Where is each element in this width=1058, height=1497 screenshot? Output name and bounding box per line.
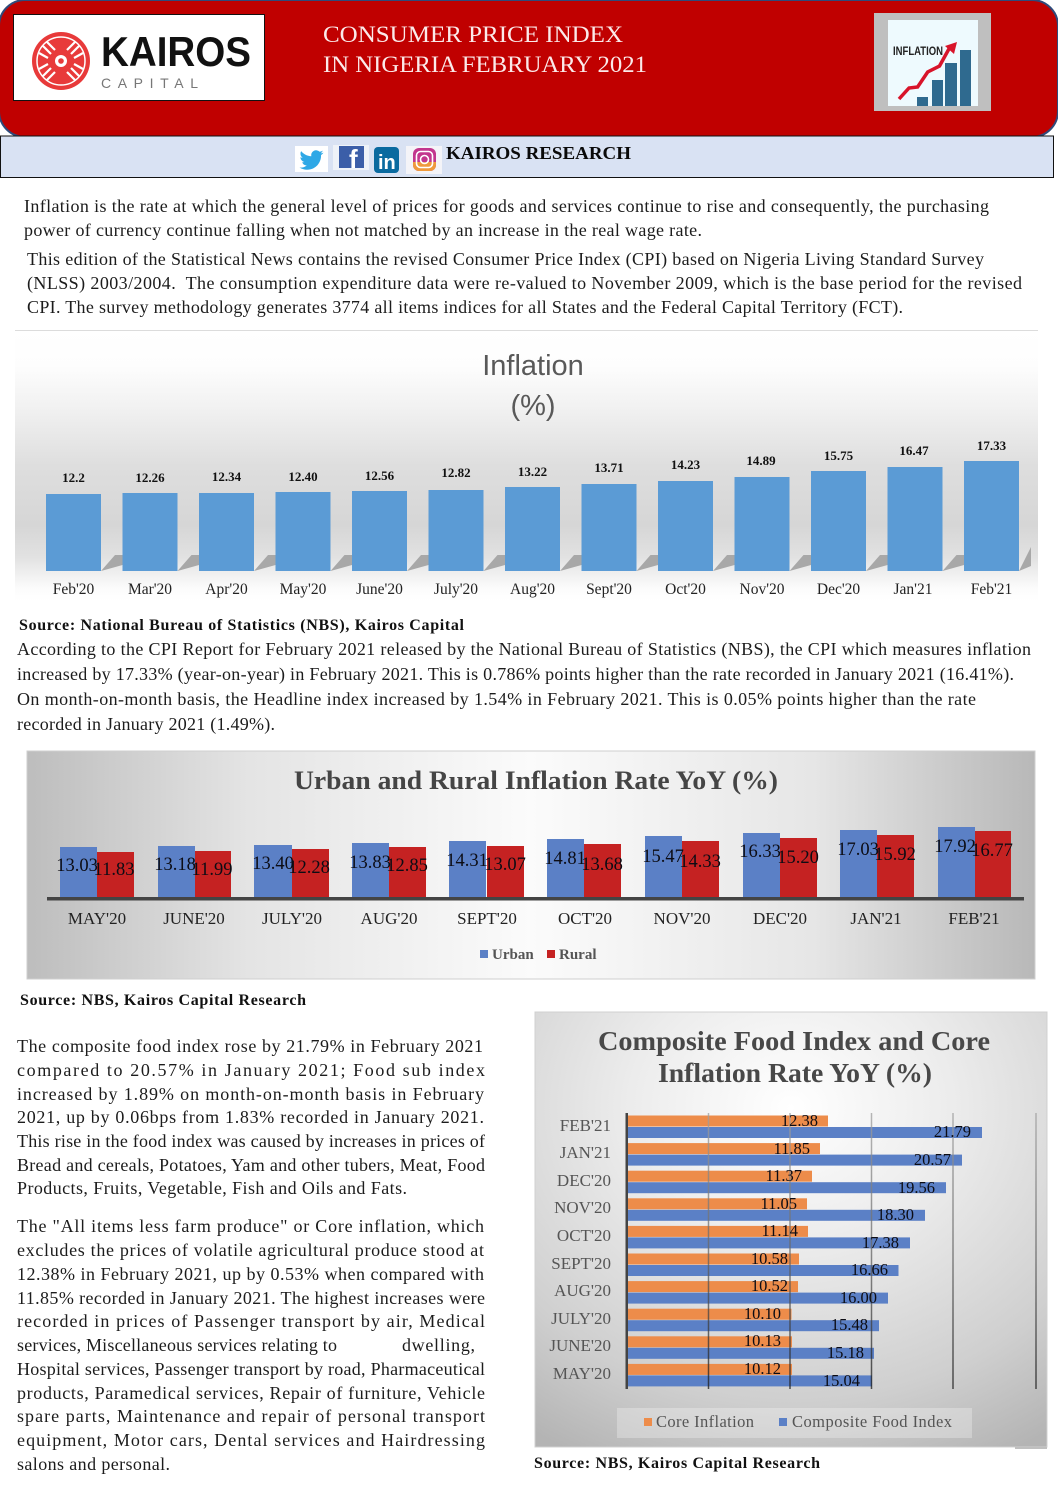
composite food data labels: 19.56 [898,1178,935,1197]
paragraph: composite food index: 2021, up by 0.06bps from 1.83% recorded in January 2021. [17,1107,484,1127]
data labels [62,438,1007,485]
core inflation data labels: 11.37 [765,1166,802,1185]
urban data labels: 17.92 [934,837,976,857]
rural data labels: 13.68 [581,855,623,875]
composite food data labels: 20.57 [914,1150,951,1169]
axis [47,897,1024,900]
core inflation data labels: 11.85 [773,1139,810,1158]
category labels: July'20 [434,581,478,598]
category labels: May'20 [280,581,327,598]
category labels: Dec'20 [817,581,860,598]
vertical axis [626,1113,628,1389]
rural data labels: 12.85 [386,856,428,876]
category labels: MAY'20 [68,909,126,928]
paragraph: CPI report summary: On month-on-month basis, the Headline index increased by 1.54% in February 2021. This is 0.05% points higher than the rate [17,689,976,709]
logo: Kairos Capital: KAIROS [101,28,251,75]
category labels: Sept'20 [586,581,632,598]
chart title: Urban and Rural Inflation Rate YoY (%) [294,766,778,795]
paragraph: CPI report summary [17,639,1031,735]
paragraph: composite food index: increased by 1.89% on month-on-month basis in February [17,1084,484,1104]
paragraph: composite food index: Products, Fruits, Vegetable, Fish and Oils and Fats. [17,1178,407,1198]
paragraph: composite food index [17,1036,485,1198]
rural data labels: 12.28 [288,858,330,878]
composite food data labels: 15.04 [823,1371,860,1390]
intro paragraph: inflation definition: power of currency continue falling when not matched by an increase in the real wage rate. [24,220,702,240]
category labels: Oct'20 [665,581,706,598]
logo: Kairos Capital: CAPITAL [101,75,198,91]
intro paragraph: statistical news: (NLSS) 2003/2004. The consumption expenditure data were re-valued to November 2009, which is the base period for the revised [27,273,1022,294]
core inflation data labels: 12.38 [781,1111,818,1130]
intro paragraph: statistical news [27,249,1022,318]
paragraph: core inflation: The "All items less farm produce" or Core inflation, which [17,1216,484,1236]
core inflation data labels: 10.52 [751,1276,788,1295]
icon: facebook [333,144,369,174]
composite food data labels: 15.18 [827,1343,864,1362]
category labels [549,1116,611,1383]
composite food data labels: 16.00 [840,1288,877,1307]
composite food data labels: 21.79 [934,1122,971,1141]
data labels: 13.71 [594,460,624,475]
chart title [598,1026,990,1088]
urban data labels [56,837,976,876]
data labels: 15.75 [824,448,854,463]
gridlines [708,1113,1036,1389]
paragraph: core inflation: dwelling, [402,1335,475,1355]
data labels: 16.47 [899,443,929,458]
icon: inflation chart [874,13,991,111]
intro paragraph: statistical news: This edition of the Statistical News contains the revised Consumer Price Index (CPI) based on Nigeria Living Standard Survey [27,249,984,270]
bars [46,461,1019,571]
data labels: 12.82 [441,465,471,480]
rural data labels: 15.20 [777,848,819,868]
icon: facebook: f [349,144,358,174]
icon: twitter [295,146,328,172]
category labels: Nov'20 [740,581,785,598]
report title: CONSUMER PRICE INDEX [323,22,623,47]
category labels: JAN'21 [560,1143,611,1162]
chart title: Composite Food Index and Core [598,1026,990,1056]
data labels: 14.23 [671,457,701,472]
legend: Rural [559,947,596,963]
paragraph: CPI report summary: increased by 17.33% (year-on-year) in February 2021. This is 0.786% points higher than the rate recorded in January 2021 (16.41%). [17,664,1014,685]
composite food data labels: 18.30 [877,1205,914,1224]
paragraph: core inflation: Hospital services, Passenger transport by road, Pharmaceutical [17,1359,485,1379]
rural data labels: 15.92 [874,845,916,865]
paragraph: CPI report summary: According to the CPI Report for February 2021 released by the National Bureau of Statistics (NBS), the CPI which measures inflation [17,639,1031,660]
data labels: 12.56 [365,468,395,483]
bar shadows [101,547,1031,571]
urban data labels: 15.47 [642,847,684,867]
intro paragraph: statistical news: CPI. The survey methodology generates 3774 all items indices for all States and the Federal Capital Territory (FCT). [27,297,903,318]
category labels: Feb'20 [53,581,95,598]
core inflation data labels: 10.58 [751,1249,788,1268]
core inflation data labels: 10.12 [744,1359,781,1378]
composite food data labels: 16.66 [851,1260,888,1279]
urban data labels: 13.18 [154,855,196,875]
paragraph: core inflation: products, Paramedical services, Repair of furniture, Vehicle [17,1383,485,1403]
urban data labels: 13.40 [252,854,294,874]
urban data labels: 13.03 [56,856,98,876]
category labels: FEB'21 [948,909,1000,928]
chart title: Inflation Rate YoY (%) [658,1058,932,1088]
data labels: 12.40 [288,469,318,484]
urban data labels: 16.33 [739,842,781,862]
category labels: Jan'21 [894,581,932,598]
legend: Composite Food Index [792,1412,953,1431]
paragraph: core inflation: recorded in prices of Passenger transport by air, Medical [17,1311,485,1331]
core inflation bars [627,1116,828,1375]
category labels: MAY'20 [553,1364,611,1383]
paragraph: composite food index: Bread and cereals, Potatoes, Yam and other tubers, Meat, Food [17,1155,485,1175]
category labels: Aug'20 [510,581,555,598]
category labels: SEPT'20 [457,909,517,928]
intro paragraph: inflation definition [24,196,989,240]
data labels: 13.22 [518,464,547,479]
logo: Kairos Capital [14,14,264,100]
legend [480,947,596,963]
rural data labels [94,841,1013,880]
chart title: Inflation [482,350,584,382]
source note: inflation chart: Source: National Bureau of Statistics (NBS), Kairos Capital [19,617,465,634]
paragraph: core inflation: 11.85% recorded in January 2021. The highest increases were [17,1288,485,1308]
composite food data labels: 15.48 [831,1315,868,1334]
data labels: 14.89 [746,453,776,468]
paragraph: core inflation: equipment, Motor cars, Dental services and Hairdressing [17,1430,485,1450]
category labels: Mar'20 [128,581,172,598]
category labels: SEPT'20 [551,1254,611,1273]
category labels: AUG'20 [361,909,417,928]
composite food data labels: 17.38 [862,1233,899,1252]
legend [617,1408,972,1438]
urban bars [60,827,975,897]
paragraph: CPI report summary: recorded in January 2021 (1.49%). [17,714,275,735]
category labels: FEB'21 [560,1116,611,1135]
paragraph: composite food index: The composite food index rose by 21.79% in February 2021 [17,1036,483,1056]
category labels: JUNE'20 [549,1336,611,1355]
category labels: AUG'20 [554,1281,611,1300]
legend: Urban [492,947,534,963]
category labels: DEC'20 [753,909,807,928]
category labels: OCT'20 [557,1226,611,1245]
rural data labels: 11.83 [94,860,134,880]
urban data labels: 13.83 [349,853,391,873]
rural bars [97,831,1011,897]
rural data labels: 11.99 [192,860,232,880]
data labels: 12.34 [212,469,242,484]
social media strip [0,136,1054,178]
paragraph: core inflation [17,1216,485,1474]
paragraph: core inflation: salons and personal. [17,1454,170,1474]
category labels: JAN'21 [850,909,902,928]
urban data labels: 17.03 [837,840,879,860]
icon: inflation chart: INFLATION [893,46,943,58]
paragraph: core inflation: spare parts, Maintenance and repair of personal transport [17,1406,485,1426]
source note: urban and rural chart: Source: NBS, Kairos Capital Research [20,992,306,1009]
category labels: JUNE'20 [163,909,225,928]
category labels: Feb'21 [971,581,1012,598]
legend: Core Inflation [656,1412,754,1431]
category labels: June'20 [356,581,403,598]
category labels: OCT'20 [558,909,612,928]
intro paragraph: inflation definition: Inflation is the rate at which the general level of prices for goods and services continue to rise and consequently, the purchasing [24,196,989,216]
report title: IN NIGERIA FEBRUARY 2021 [323,52,647,77]
strip label: KAIROS RESEARCH [446,143,631,163]
data labels: 17.33 [977,438,1007,453]
category labels: JULY'20 [262,909,322,928]
icon: instagram [406,146,442,174]
composite food index bars [627,1127,982,1386]
composite food data labels [823,1122,971,1390]
chart title: (%) [510,390,556,422]
category labels [68,909,1000,928]
category labels: NOV'20 [654,909,710,928]
chart title [482,350,584,422]
core inflation data labels: 11.05 [760,1194,797,1213]
rural data labels: 16.77 [971,841,1013,861]
report title [323,22,647,77]
category labels [53,581,1012,598]
icon: linkedin: in [378,152,396,174]
paragraph: core inflation: services, Miscellaneous services relating to [17,1335,337,1355]
paragraph: core inflation: 12.38% in February 2021, up by 0.53% when compared with [17,1264,484,1284]
chart: urban and rural inflation [27,751,1035,979]
urban data labels: 14.31 [446,851,488,871]
category labels: DEC'20 [557,1171,611,1190]
paragraph: composite food index: This rise in the food index was caused by increases in prices of [17,1131,485,1151]
paragraph: core inflation: excludes the prices of volatile agricultural produce stood at [17,1240,484,1260]
category labels: Apr'20 [205,581,248,598]
icon: linkedin [374,147,399,174]
core inflation data labels: 10.10 [744,1304,781,1323]
header banner [0,0,1058,137]
data labels: 12.2 [62,470,85,485]
category labels: NOV'20 [554,1198,611,1217]
rural data labels: 14.33 [679,852,721,872]
core inflation data labels: 11.14 [761,1221,798,1240]
source note: composite food chart: Source: NBS, Kairos Capital Research [534,1455,820,1472]
category labels: JULY'20 [551,1309,611,1328]
chart: composite food index and core inflation [535,1012,1047,1449]
core inflation data labels [744,1111,818,1378]
data labels: 12.26 [135,470,165,485]
urban data labels: 14.81 [544,849,586,869]
rural data labels: 13.07 [484,855,526,875]
chart: inflation bar chart [15,330,1038,601]
paragraph: composite food index: compared to 20.57% in January 2021; Food sub index [17,1060,485,1080]
core inflation data labels: 10.13 [744,1331,781,1350]
